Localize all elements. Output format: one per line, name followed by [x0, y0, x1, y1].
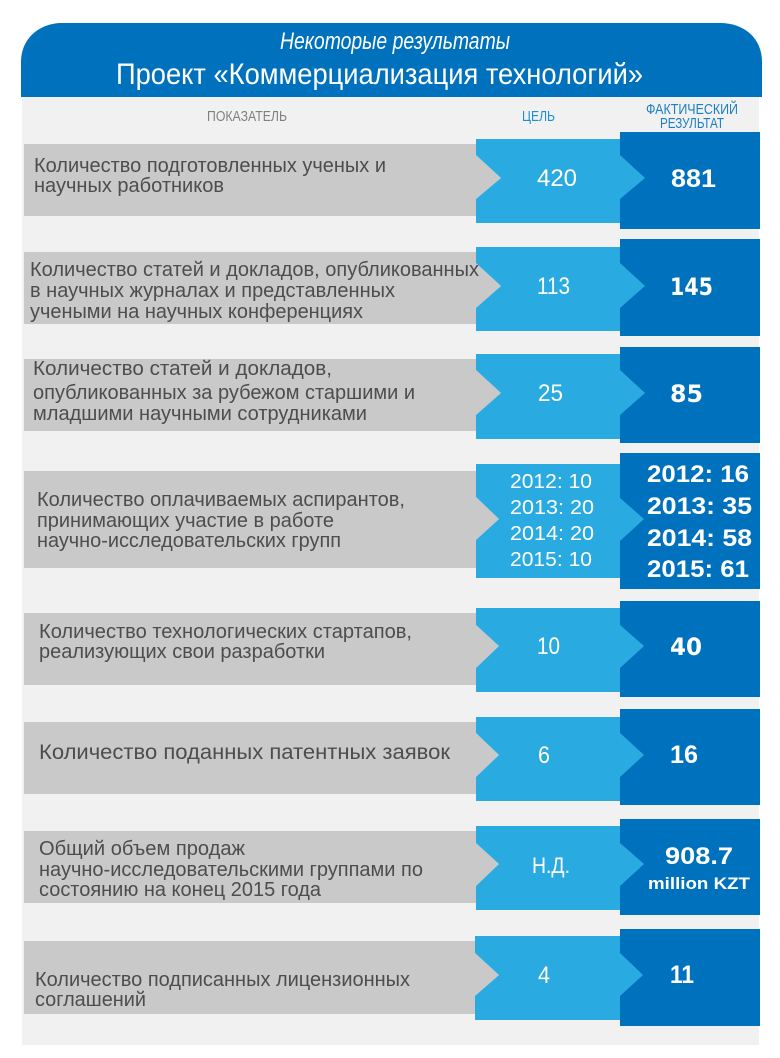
row 4 actual: 2013: 35	[647, 493, 752, 520]
row 6 label: Количество поданных патентных заявок	[39, 740, 451, 764]
row 7 label: состоянию на конец 2015 года	[39, 878, 322, 901]
column heading: target: ЦЕЛЬ	[522, 108, 555, 125]
row 3 target: 25	[538, 380, 563, 407]
row 4 actual: 2015: 61	[647, 556, 749, 583]
column heading: indicator: ПОКАЗАТЕЛЬ	[207, 108, 287, 125]
row 3 label: Количество статей и докладов,	[33, 357, 332, 380]
row 1 actual: 881	[671, 165, 716, 193]
row 5 target: 10	[537, 633, 560, 660]
row 2 label	[30, 258, 480, 323]
row 1 label: Количество подготовленных ученых и	[34, 154, 386, 177]
row 4 label: Количество оплачиваемых аспирантов,	[37, 488, 405, 511]
row 1 label: научных работников	[34, 174, 224, 197]
row 4 target: 2015: 10	[510, 549, 592, 571]
row 8 label: Количество подписанных лицензионных	[35, 968, 411, 991]
row 4 target	[510, 471, 594, 571]
row 3 label: младшими научными сотрудниками	[33, 402, 367, 425]
row 4 target: 2013: 20	[510, 497, 594, 519]
row 1 label	[34, 154, 386, 197]
row 7 label: научно-исследовательскими группами по	[39, 858, 423, 881]
row 4 label	[37, 488, 405, 552]
row 6: patent applications	[24, 709, 760, 805]
row 3: articles published abroad	[24, 347, 760, 443]
row 2 label: Количество статей и докладов, опубликованных	[30, 258, 480, 281]
row 4 target: 2012: 10	[510, 471, 592, 493]
row 4 actual	[647, 461, 752, 583]
row 6 target: 6	[538, 742, 550, 769]
row 7 label: Общий объем продаж	[39, 837, 245, 860]
row 2: articles and reports	[24, 239, 760, 336]
row 4 label: научно-исследовательских групп	[37, 529, 341, 552]
row 6 actual: 16	[670, 741, 698, 769]
row 7 actual	[648, 843, 751, 893]
row 7 actual: 908.7	[665, 843, 733, 870]
row 7 target: Н.Д.	[532, 853, 570, 878]
row 4: paid graduate students	[24, 453, 760, 589]
row 3 actual: 85	[670, 380, 703, 408]
row 5 label	[39, 620, 412, 663]
row 5 label: Количество технологических стартапов,	[39, 620, 412, 643]
row 2 label: в научных журналах и представленных	[30, 279, 396, 302]
row 4 target: 2014: 20	[510, 523, 594, 545]
row 8 label	[35, 968, 411, 1011]
row 1 target: 420	[537, 165, 577, 192]
title: Проект «Коммерциализация технологий»	[116, 58, 643, 91]
row 1: trained scientists	[24, 132, 760, 229]
row 2 actual: 145	[670, 273, 713, 301]
column heading: actual result	[646, 100, 738, 132]
row 4 actual: 2012: 16	[647, 461, 749, 488]
row 7: total sales	[24, 819, 760, 915]
subtitle: Некоторые результаты	[280, 28, 510, 55]
row 2 label: учеными на научных конференциях	[30, 300, 364, 323]
row 8: licensing agreements	[24, 929, 760, 1026]
column heading: actual result: ФАКТИЧЕСКИЙ	[646, 100, 738, 118]
row 4 label: принимающих участие в работе	[37, 509, 334, 532]
row 8 actual: 11	[670, 961, 694, 989]
row 4 actual: 2014: 58	[647, 525, 752, 552]
header banner	[21, 23, 762, 97]
row 3 label	[33, 357, 415, 425]
row 3 label: опубликованных за рубежом старшими и	[33, 381, 415, 404]
row 2 target: 113	[537, 273, 570, 300]
row 5 actual: 40	[670, 633, 702, 661]
row 7 label	[39, 837, 423, 901]
row 8 target: 4	[538, 962, 550, 989]
row 7 actual: million KZT	[648, 874, 751, 893]
row 5: technology startups	[24, 601, 760, 697]
column heading: actual result: РЕЗУЛЬТАТ	[660, 115, 724, 132]
row 5 label: реализующих свои разработки	[39, 640, 325, 663]
row 8 label: соглашений	[35, 988, 146, 1011]
